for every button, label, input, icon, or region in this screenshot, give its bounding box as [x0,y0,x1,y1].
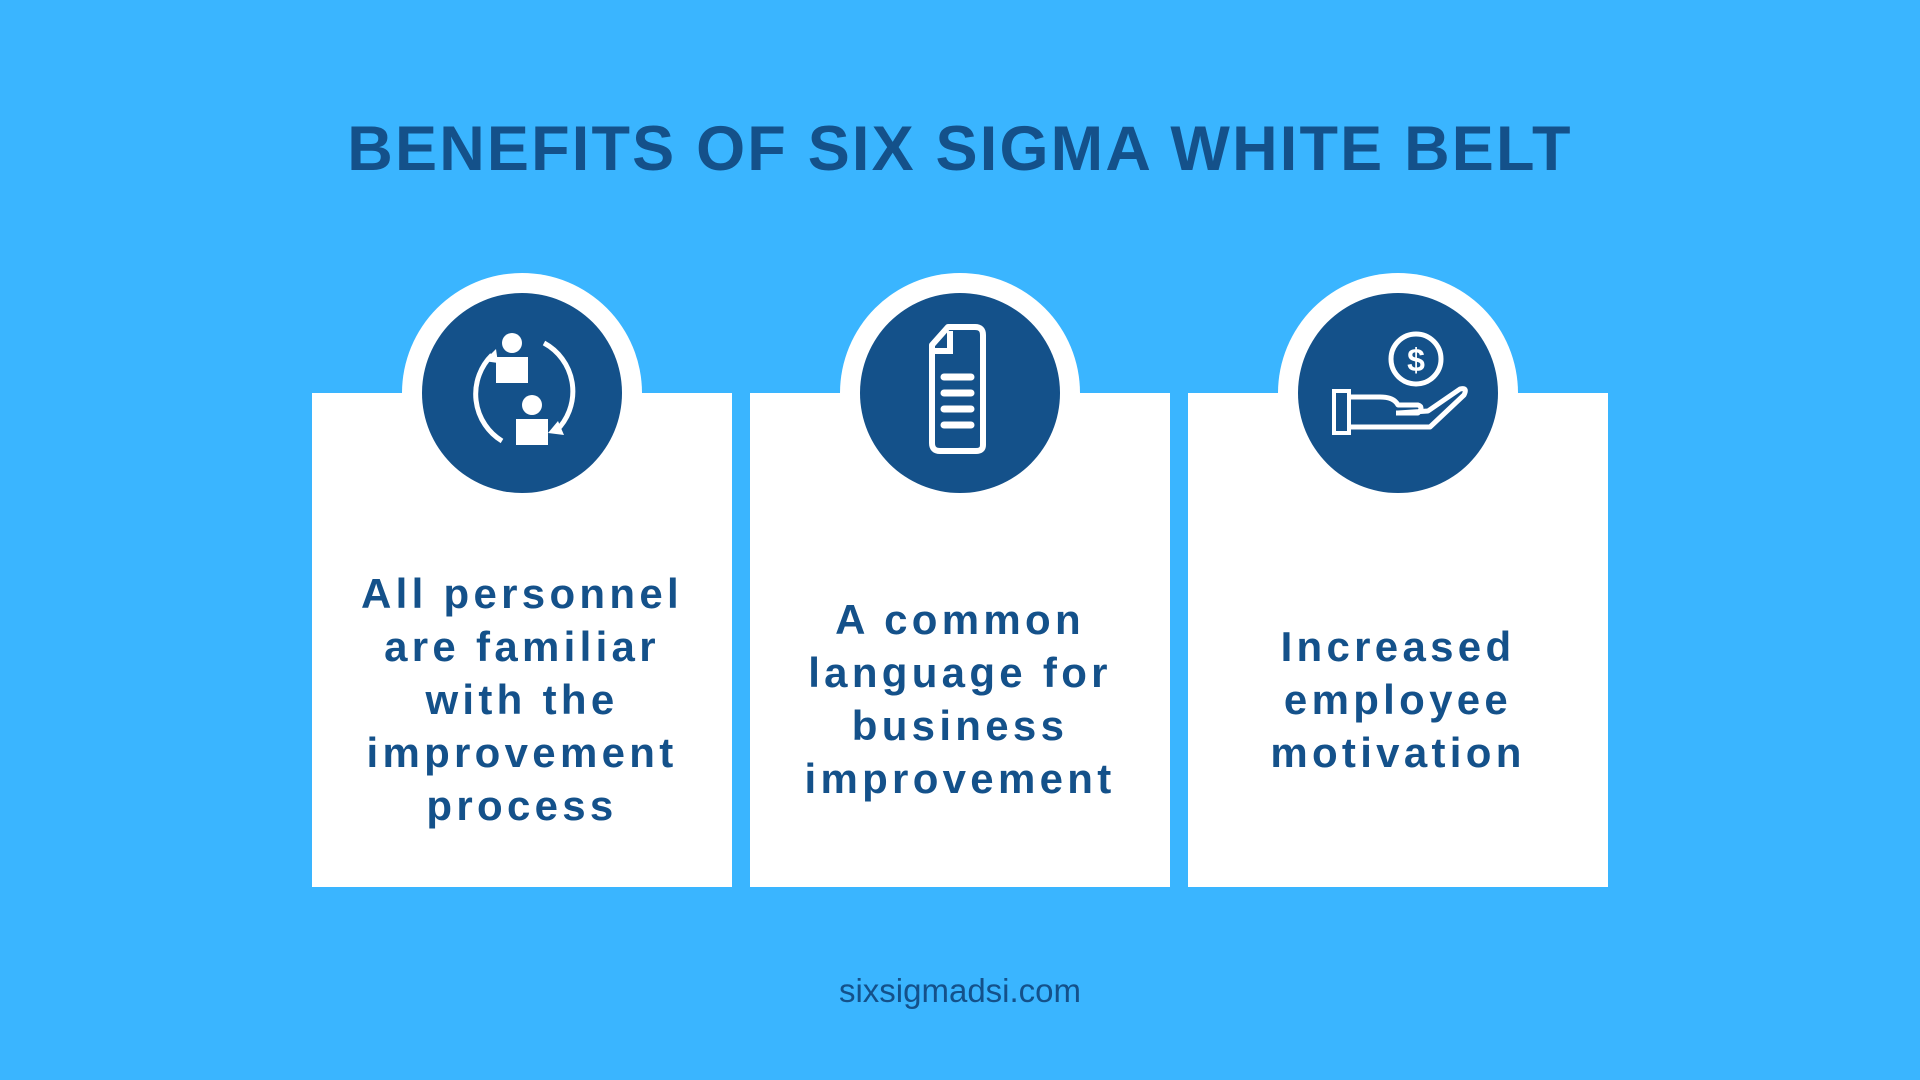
text: card 1: are familiar [384,622,660,670]
text: card 2: improvement [804,755,1116,802]
text: card 1 [361,570,683,828]
text: card 1: with the [425,676,619,722]
card 3 background [1188,393,1608,887]
text: card 2: A common [835,596,1085,643]
text: card 3 [1270,622,1526,776]
title: BENEFITS OF SIX SIGMA WHITE BELT [347,114,1573,184]
card 2 background [750,393,1170,887]
text: card 2: business [852,702,1068,749]
text: card 1: process [426,782,618,828]
ring 1 [402,273,642,513]
footer: sixsigmadsi.com [839,972,1081,1009]
text: card 3: employee [1284,676,1512,722]
ring 3 [1278,273,1518,513]
ring 2 [840,273,1080,513]
text: card 3: Increased [1281,622,1515,670]
icon: hand with coin: $ [1407,342,1425,378]
icon: document [860,293,1060,493]
text: card 1: improvement [366,728,678,776]
card 1 background [312,393,732,887]
text: card 2: language for [808,649,1112,696]
text: card 2 [804,596,1116,802]
icon: people cycle [422,293,622,493]
icon: hand with coin [1298,293,1498,493]
text: card 1: All personnel [361,570,683,616]
text: card 3: motivation [1270,728,1526,776]
